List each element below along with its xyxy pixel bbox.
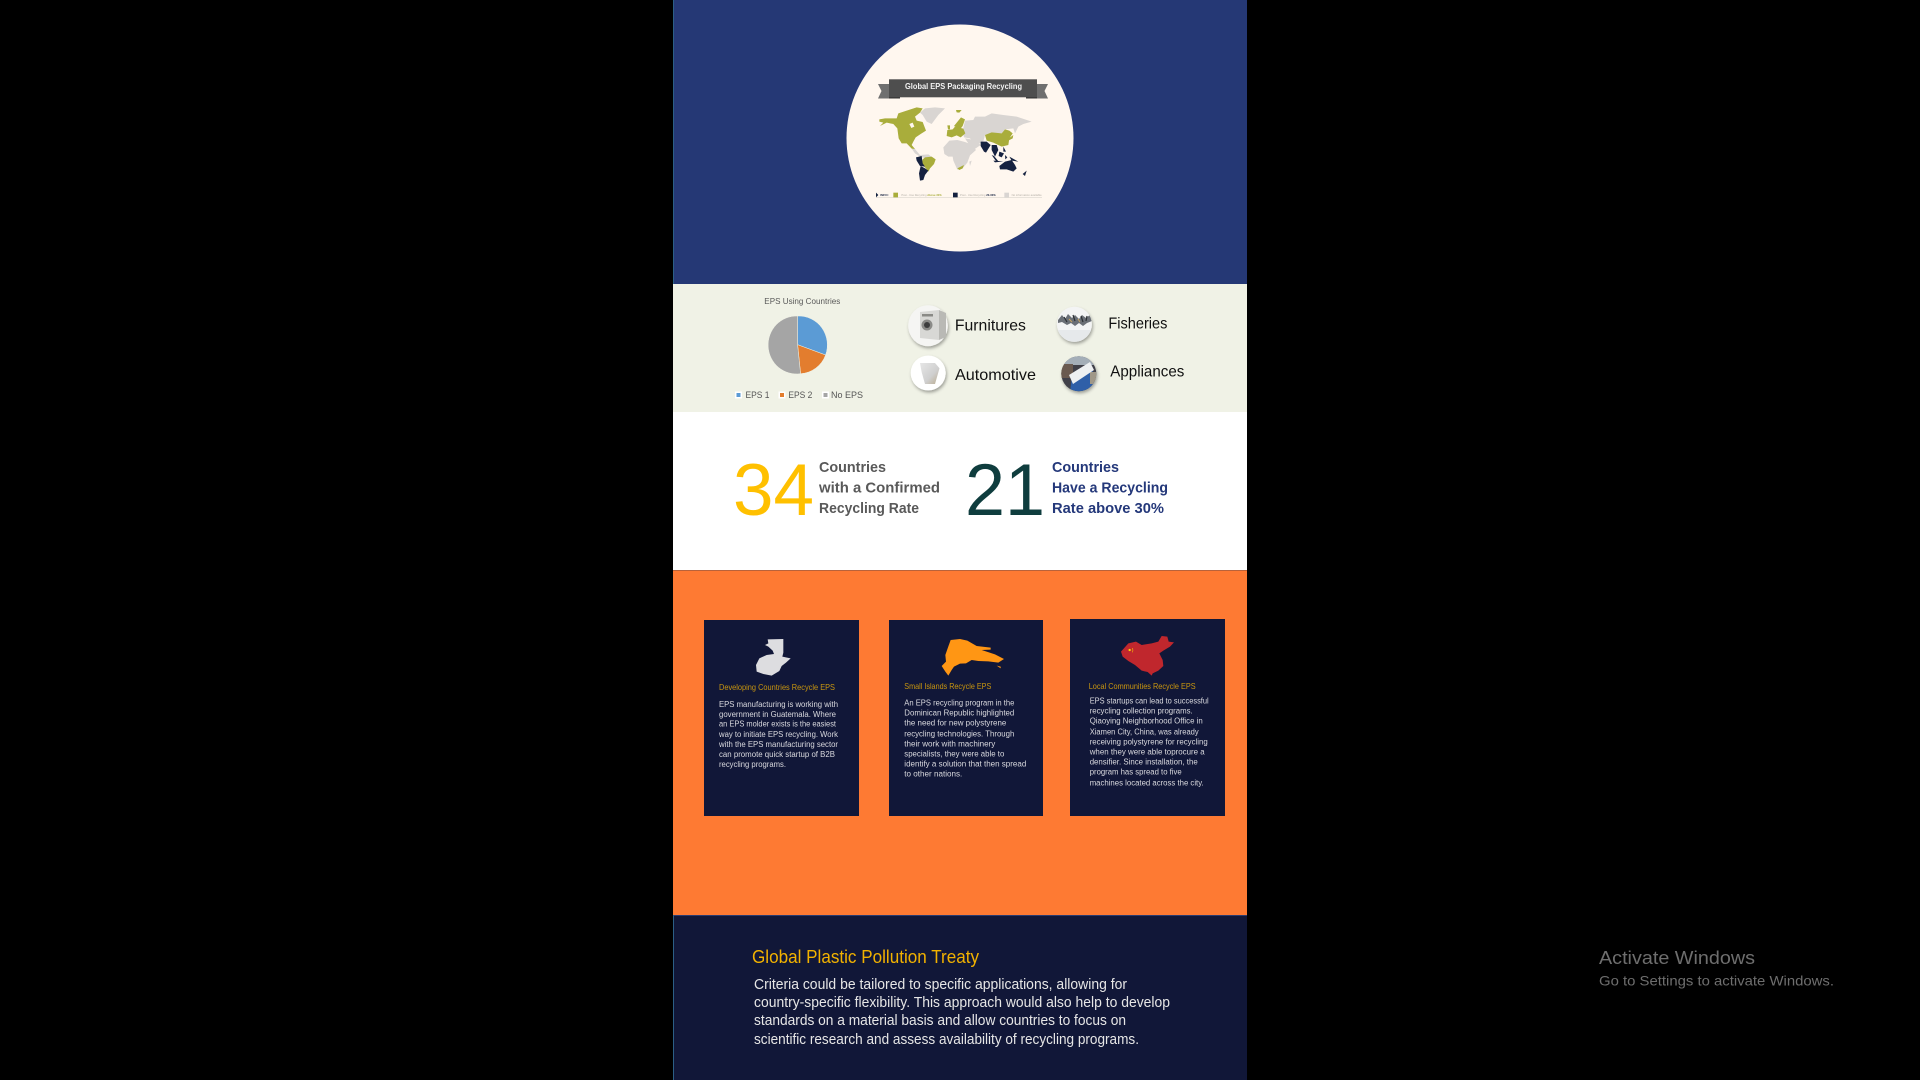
card body: densifier. Since installation, the: [1090, 758, 1198, 767]
card body: [1089, 697, 1209, 788]
stat: 21 countries: Rate above 30%: [1052, 500, 1164, 517]
label: fisheries: Fisheries: [1108, 316, 1167, 333]
treaty body: [754, 977, 1170, 1048]
stat: 34 countries: 34: [733, 450, 814, 531]
map legend: No information available: [1012, 193, 1042, 197]
card body: program has spread to five: [1090, 768, 1182, 777]
card body: way to initiate EPS recycling. Work: [718, 730, 839, 739]
stat: 34 countries: Recycling Rate: [819, 500, 919, 517]
stat: 21 countries: 21: [965, 450, 1045, 531]
icon: appliances: [1061, 356, 1098, 392]
pie legend: No EPS: [831, 390, 863, 400]
note: Hudson Bay: [909, 123, 914, 128]
card body: an EPS molder exists is the easiest: [719, 720, 837, 728]
map legend: INFO:: [880, 193, 889, 197]
card body: specialists, they were able to: [904, 750, 1005, 759]
map ribbon title: Global EPS Packaging Recycling: [905, 82, 1022, 91]
card body: to other nations.: [904, 770, 962, 779]
panel: stats: [673, 412, 1247, 570]
pie legend: EPS 2: [788, 390, 812, 400]
map legend: Post - Use Recycling Above 30%: [901, 193, 942, 197]
card body: recycling collection programs.: [1090, 707, 1193, 716]
icon: Dominican Republic silhouette: [942, 639, 1004, 676]
card: local communities: [1070, 619, 1225, 816]
panel: case studies: [673, 570, 1247, 915]
panel: uses: [673, 284, 1247, 412]
stat: 21 countries: [965, 450, 1168, 531]
stat: 21 countries: Countries: [1052, 459, 1119, 476]
stat: 21 countries: Have a Recycling: [1052, 480, 1168, 496]
map circle: [846, 24, 1074, 252]
map legend: Post - Use Recycling 20-30%: [960, 193, 996, 197]
card body: recycling technologies. Through: [904, 730, 1014, 739]
card body: identify a solution that then spread: [904, 760, 1026, 769]
card heading: Small Islands Recycle EPS: [904, 681, 992, 691]
treaty body: scientific research and assess availability of recycling programs.: [754, 1032, 1139, 1048]
card body: can promote quick startup of B2B: [719, 750, 835, 759]
pie legend: EPS 1: [746, 390, 770, 400]
treaty heading: Global Plastic Pollution Treaty: [752, 947, 979, 967]
world map: [879, 107, 1032, 181]
icon: Guatemala silhouette: [756, 639, 791, 676]
card body: Qiaoying Neighborhood Office in: [1090, 717, 1203, 726]
card body: with the EPS manufacturing sector: [718, 740, 838, 749]
watermark: activate windows: [1599, 948, 1834, 989]
watermark: activate windows: Go to Settings to activate Windows.: [1599, 973, 1834, 989]
card heading: Local Communities Recycle EPS: [1089, 681, 1196, 691]
panel: map header: [673, 0, 1247, 284]
card: developing countries: [704, 620, 859, 816]
stat: 34 countries: with a Confirmed: [818, 480, 940, 496]
card body: [718, 700, 839, 769]
map legend: [876, 193, 1042, 198]
card body: Dominican Republic highlighted: [904, 709, 1014, 718]
pie legend: [735, 390, 863, 400]
card body: [904, 699, 1026, 779]
card body: their work with machinery: [904, 740, 995, 749]
card body: when they were able toprocure a: [1089, 748, 1205, 757]
card body: EPS startups can lead to successful: [1090, 697, 1209, 706]
stat: 34 countries: [733, 450, 940, 531]
treaty body: country-specific flexibility. This approach would also help to develop: [754, 995, 1170, 1011]
label: automotive: Automotive: [955, 367, 1036, 384]
card body: EPS manufacturing is working with: [719, 700, 838, 709]
card body: government in Guatemala. Where: [719, 710, 837, 719]
watermark: activate windows: Activate Windows: [1599, 948, 1755, 968]
panel: treaty: [673, 915, 1247, 1080]
icon: China silhouette: [1121, 636, 1174, 676]
treaty body: standards on a material basis and allow countries to focus on: [754, 1013, 1126, 1029]
card body: An EPS recycling program in the: [904, 699, 1015, 708]
card body: the need for new polystyrene: [904, 719, 1007, 728]
label: appliances: Appliances: [1110, 364, 1184, 381]
icon: furnitures: [908, 305, 948, 346]
card body: machines located across the city.: [1090, 779, 1204, 788]
card heading: Developing Countries Recycle EPS: [719, 682, 835, 692]
icon: fisheries: [1056, 307, 1093, 343]
stat: 34 countries: Countries: [819, 459, 886, 476]
icon: automotive: [911, 356, 946, 390]
map ribbon title: [878, 79, 1048, 98]
treaty body: Criteria could be tailored to specific applications, allowing for: [754, 977, 1127, 993]
card: small islands: [889, 620, 1043, 816]
pie chart: EPS using countries: EPS Using Countries: [764, 296, 840, 306]
label: furnitures: Furnitures: [955, 318, 1026, 335]
card body: receiving polystyrene for recycling: [1090, 738, 1208, 747]
card body: Xiamen City, China, was already: [1090, 728, 1199, 737]
card body: recycling programs.: [719, 760, 786, 769]
pie chart: EPS using countries: [764, 296, 840, 374]
